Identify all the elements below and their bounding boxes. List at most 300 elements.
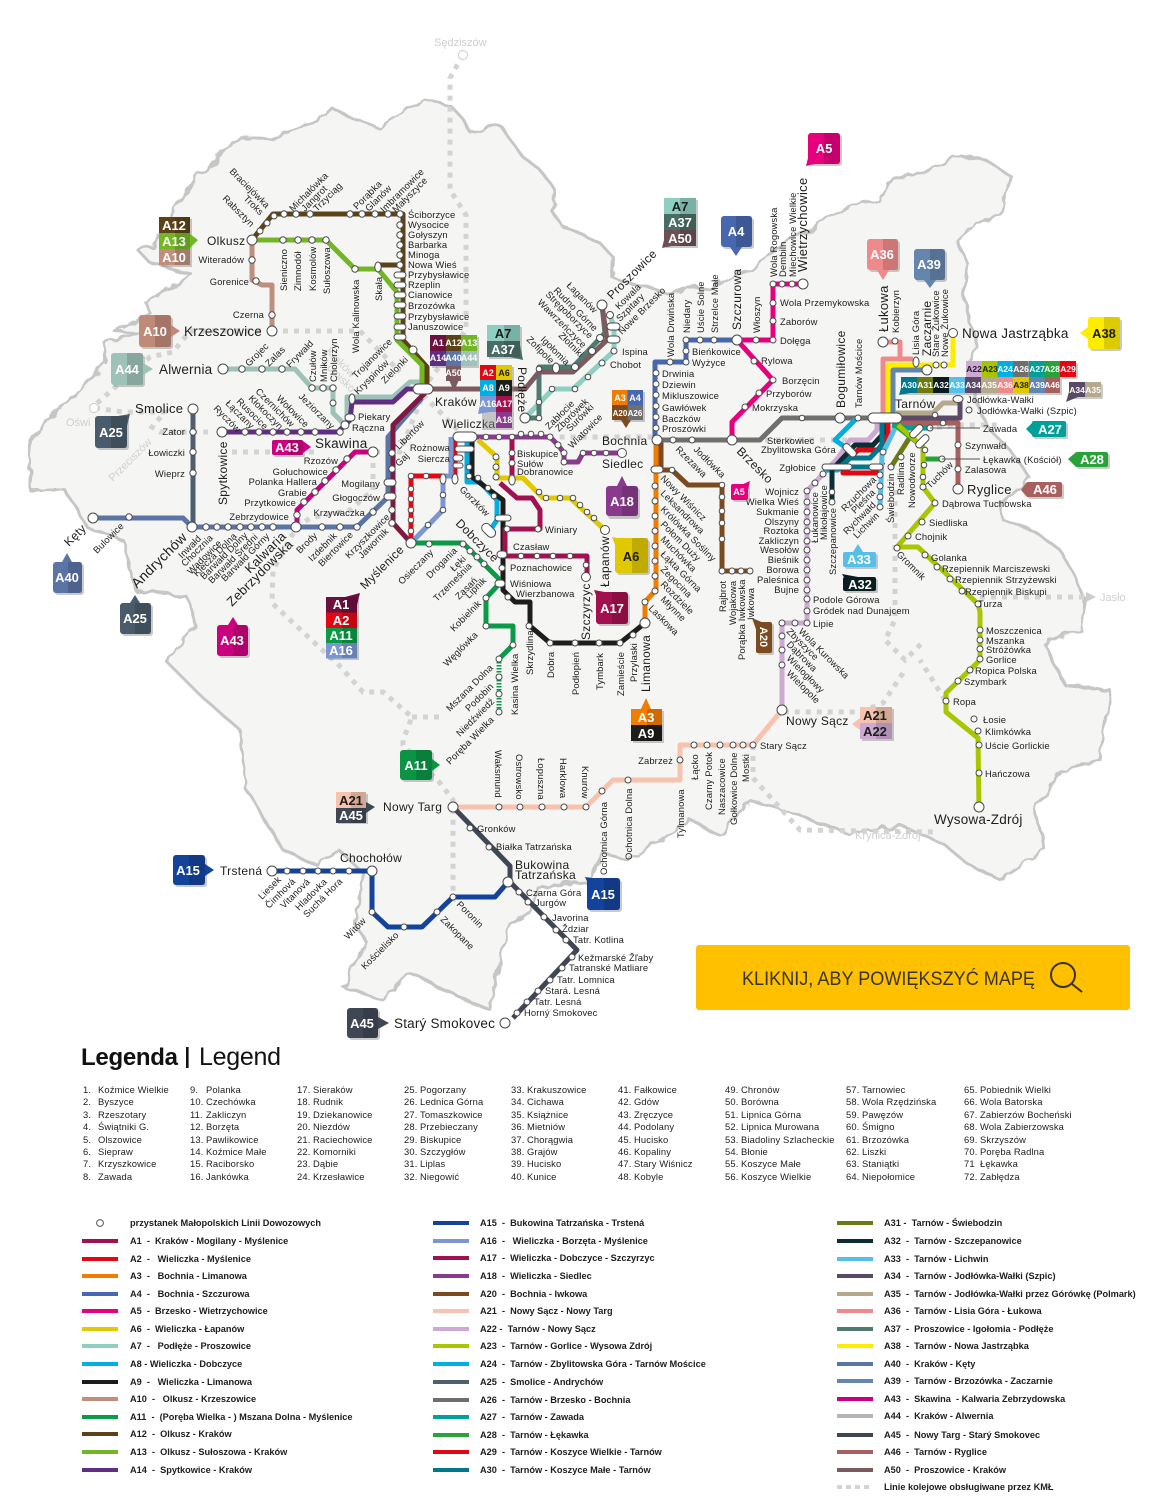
station labels: Wieliczka and Dobczyce: Gorzków: [458, 484, 492, 518]
numbered list of municipalities: Dąbie: [313, 1158, 338, 1169]
station labels: Tarnów and east: Uście Gorlickie: [985, 740, 1050, 751]
station labels: Bochnia to Tarnów: Bieńkowice: [692, 346, 741, 357]
legend: column 1: A12 - Olkusz - Kraków: [130, 1429, 232, 1439]
numbered list of municipalities: 29.: [404, 1134, 417, 1145]
station labels: Wieliczka and Dobczyce: Łapanów: [598, 536, 612, 587]
station labels: Bochnia to Tarnów: Wojnicz: [765, 486, 799, 497]
badge: A21 A22: A22: [863, 724, 887, 739]
station labels: west: Wysocice: [408, 219, 449, 230]
station labels: Bochnia to Tarnów: Zakliczyn: [759, 535, 799, 546]
numbered list of municipalities: 10.: [190, 1096, 203, 1107]
numbered list of municipalities: 60.: [846, 1121, 859, 1132]
station labels: west: Chocznia: [179, 532, 215, 568]
station labels: Bochnia to Tarnów: Przyborów: [766, 388, 812, 399]
legend: column 2: A26 - Tarnów - Brzesko - Bochnia: [480, 1395, 631, 1405]
station labels: Wieliczka and Dobczyce: Sułów: [517, 458, 543, 469]
legend: column 3: Linie kolejowe obsługiwane przez KMŁ: [884, 1482, 1054, 1492]
station labels: Tarnów and east: Szynwałd: [965, 440, 1006, 451]
station labels: south: Čimhová: [263, 875, 298, 910]
route A37: [525, 305, 605, 418]
badge: A1 A12 A13 A14 A40 A44 A50: A13: [461, 338, 477, 348]
station labels: Wieliczka and Dobczyce: Drogania: [424, 544, 460, 580]
station labels: west: Bulowice: [91, 520, 126, 555]
station labels: west: Glanów: [363, 182, 394, 213]
station labels: Tarnów and east: Rzepiennik Marciszewski: [942, 563, 1050, 574]
station labels: Bochnia to Tarnów: Borowa: [766, 564, 800, 575]
station labels: west: Wola Kalinowska: [350, 279, 361, 353]
badge: A1 A12 A13 A14 A40 A44 A50: A12: [445, 338, 462, 348]
numbered list of municipalities: Dziekanowice: [313, 1109, 373, 1120]
station labels: west: Brody: [294, 530, 319, 555]
stops: Tarnów area: [822, 328, 984, 812]
badge: A12 A13 A10: A13: [162, 234, 186, 249]
numbered list of municipalities: 36.: [511, 1121, 524, 1132]
station labels: west: Smolice: [135, 401, 183, 416]
numbered list of municipalities: 54.: [725, 1146, 738, 1157]
numbered list of municipalities: 55.: [725, 1158, 738, 1169]
station labels: south: Ochotnica Górna: [598, 801, 609, 875]
numbered list of municipalities: Jankówka: [206, 1171, 249, 1182]
legend: column 2: A22 - Tarnów - Nowy Sącz: [480, 1324, 596, 1334]
numbered list of municipalities: 17.: [297, 1084, 310, 1095]
route A11: [411, 543, 513, 659]
badge row: A30–A46: A30: [901, 380, 917, 390]
station labels: Tarnów and east: Klimkówka: [985, 726, 1032, 737]
station labels: west: Rzozów: [304, 455, 338, 466]
station labels: Wieliczka and Dobczyce: Dobczyce: [453, 516, 502, 565]
station labels: Bochnia to Tarnów: Dołęga: [780, 335, 811, 346]
station labels: Tarnów and east: Ropa: [953, 696, 977, 707]
station labels: Tarnów and east: Łękawka (Kościół): [983, 454, 1062, 465]
legend: column 3: [837, 1217, 1136, 1492]
station labels: west: Czułów: [307, 350, 318, 382]
station labels: west: Cianowice: [408, 289, 453, 300]
station labels: Bochnia to Tarnów: Tarnów Mościce: [853, 339, 864, 408]
numbered list of municipalities: Koźmice Wielkie: [98, 1084, 169, 1095]
numbered list of municipalities: Śmigno: [862, 1121, 895, 1132]
station labels: Wieliczka and Dobczyce: Igołomia: [539, 334, 573, 368]
station labels: south: Łopuszna: [536, 758, 547, 800]
station labels: Wieliczka and Dobczyce: Limanowa: [639, 635, 653, 692]
station labels: west: Czernichów: [254, 386, 297, 429]
station labels: Wieliczka and Dobczyce: Wawrzeńczyce: [536, 297, 589, 350]
station labels: west: Piekary: [358, 411, 390, 422]
station labels: west: Klecza Dolna: [191, 530, 239, 578]
station labels: south: Chochołów: [340, 851, 402, 865]
badge: A3 A9: [631, 698, 664, 743]
station labels: Tarnów and east: Gorlice: [986, 654, 1017, 665]
station labels: Wieliczka and Dobczyce: Szpitary: [614, 291, 646, 323]
numbered list of municipalities: 20.: [297, 1121, 310, 1132]
badge: A21 A22: [852, 707, 894, 741]
legend heading: Legenda: [81, 1044, 179, 1071]
station labels: west: Spytkowice: [216, 441, 230, 505]
numbered list of municipalities: Brzozówka: [862, 1134, 910, 1145]
badge: A15 left: A15: [176, 863, 200, 878]
numbered list of municipalities: Zabłędza: [980, 1171, 1020, 1182]
numbered list of municipalities: Pawlikowice: [206, 1134, 259, 1145]
station labels: Wieliczka and Dobczyce: Libertów: [393, 418, 426, 451]
station labels: west: Porąbka: [351, 178, 384, 211]
numbered list of municipalities: Pobiednik Wielki: [980, 1084, 1051, 1095]
station labels: Tarnów and east: Chojnik: [915, 531, 947, 542]
badge: A39: A39: [917, 257, 941, 272]
numbered list of municipalities: Wola Batorska: [980, 1096, 1043, 1107]
numbered list of municipalities: Podolany: [634, 1121, 674, 1132]
station labels: Wieliczka and Dobczyce: Wiatowice: [566, 411, 605, 450]
numbered list of municipalities: 64.: [846, 1171, 859, 1182]
numbered list of municipalities: 66.: [964, 1096, 977, 1107]
station labels: west: Zielonki: [379, 354, 410, 385]
badge: A1 A12 A13 A14 A40 A44 A50: A40: [445, 353, 462, 363]
station labels: Wieliczka and Dobczyce: Łaganów: [565, 280, 600, 315]
legend: column 3: A43 - Skawina - Kalwaria Zebrzydowska: [884, 1394, 1066, 1404]
route A34: [895, 400, 960, 418]
station labels: Bochnia to Tarnów: Rozdziele: [659, 579, 696, 616]
badge: A2 A6 A8 A9 A16 A17 A18: A16: [480, 399, 496, 409]
badge: A7 A37 second: A37: [491, 342, 515, 357]
station labels: south: Poronin: [455, 899, 486, 930]
station labels: west: Kosmolów: [307, 246, 318, 291]
numbered list of municipalities: 21.: [297, 1134, 310, 1145]
numbered list of municipalities: Polanka: [206, 1084, 242, 1095]
numbered list of municipalities: Książnice: [527, 1109, 568, 1120]
numbered list of municipalities: Pogorzany: [420, 1084, 466, 1095]
station labels: Tarnów and east: Zalasowa: [965, 464, 1007, 475]
badge: A43 upper: A43: [275, 440, 299, 455]
station labels: west: Jangrot: [299, 183, 329, 213]
numbered list of municipalities: 6.: [83, 1146, 91, 1157]
numbered list of municipalities: Borzęta: [206, 1121, 240, 1132]
station labels: south: Harklowa: [558, 758, 569, 799]
label: Kraków Lotnisko: Kraków: [323, 346, 357, 380]
badge: A38: A38: [1092, 326, 1116, 341]
station labels: Tarnów and east: Łukowa: [876, 285, 891, 332]
numbered list of municipalities: Pawęzów: [862, 1109, 903, 1120]
station labels: Bochnia to Tarnów: Zgłobice: [779, 462, 816, 473]
station labels: Wieliczka and Dobczyce: Wierzbanowa: [516, 588, 575, 599]
station labels: west: Przybysławice: [408, 269, 469, 280]
numbered list of municipalities: Chorągwia: [527, 1134, 574, 1145]
station labels: south: Waksmund: [493, 750, 504, 798]
badge row: A22–A29: A23: [982, 364, 998, 374]
station labels: Bochnia to Tarnów: Mikołajowice: [818, 485, 829, 540]
badge: A21 A45: A21: [339, 793, 363, 808]
route A28: [895, 425, 942, 459]
badge: A1 A2 A11 A16: A11: [329, 628, 353, 643]
badge: A5: [806, 133, 842, 166]
badge: A21 A45: A45: [339, 808, 363, 823]
station labels: Bochnia to Tarnów: Gawłówek: [662, 402, 707, 413]
station labels: west: Olkusz: [207, 234, 245, 248]
numbered list of municipalities: Hucisko: [634, 1134, 668, 1145]
station labels: west: Wołowice: [275, 393, 311, 430]
station labels: Bochnia to Tarnów: Baczków: [662, 413, 701, 424]
numbered list of municipalities: Kopaliny: [634, 1146, 671, 1157]
route A27: [892, 425, 930, 428]
route A22: [782, 420, 877, 710]
legend: column 1: [82, 1218, 353, 1475]
numbered list of municipalities: 72.: [964, 1171, 977, 1182]
station labels: west: Jeziorzany: [297, 391, 337, 431]
station labels: west: Grojec: [243, 340, 271, 368]
station labels: Wieliczka and Dobczyce: Przylaski: [628, 643, 639, 682]
badge row: A30–A46: [899, 377, 1062, 395]
station labels: Wieliczka and Dobczyce: Podłęże: [515, 367, 529, 412]
route A17: [500, 437, 587, 577]
stops: Bochnia, Szczurowa, Brzesko: [642, 279, 861, 605]
numbered list of municipalities: Tarnowiec: [862, 1084, 906, 1095]
station labels: west: Myślenice: [357, 543, 407, 592]
station labels: south: Białka Tatrzańska: [496, 841, 572, 852]
station labels: west: Przybysławice: [408, 311, 469, 322]
route A15: [272, 871, 508, 927]
badge: A39: [914, 249, 947, 288]
badge: A28: [1068, 452, 1110, 469]
station labels: west: Kryspinów: [352, 357, 391, 396]
badge: A6: A6: [623, 549, 639, 564]
route A35: [895, 403, 958, 413]
numbered list of municipalities: 2.: [83, 1096, 91, 1107]
station labels: west: Barbarka: [408, 239, 448, 250]
badge: A43 upper: [272, 440, 311, 457]
station labels: west: Wieprz: [155, 468, 185, 479]
station labels: Wieliczka and Dobczyce: [393, 247, 667, 766]
station labels: Tarnów and east: Stróżówka: [986, 644, 1032, 655]
numbered list of municipalities: Świątniki G.: [98, 1121, 149, 1132]
station labels: Tarnów and east: Golanka: [931, 552, 968, 563]
badge: A18: [606, 476, 640, 519]
station labels: south: Tylmanowa: [675, 789, 686, 838]
station labels: Wieliczka and Dobczyce: Zamieście: [615, 652, 626, 696]
numbered list of municipalities: Kunice: [527, 1171, 557, 1182]
badge: A32: A32: [848, 577, 872, 592]
station labels: south: Tatr. Lesná: [534, 996, 582, 1007]
numbered list of municipalities: 61.: [846, 1134, 859, 1145]
station labels: Bochnia to Tarnów: Wola Kurowska: [797, 626, 852, 681]
station labels: Bochnia to Tarnów: Rzuchowa: [839, 473, 879, 513]
badge: A32: [842, 574, 878, 593]
numbered list of municipalities: Zawada: [98, 1171, 133, 1182]
station labels: west: Skawina: [315, 436, 368, 451]
numbered list of municipalities: Koszyce Małe: [741, 1158, 801, 1169]
station labels: Bochnia to Tarnów: Tuchów: [924, 459, 955, 490]
badge: A3 A4 A20 A26: [612, 390, 645, 428]
station labels: Wieliczka and Dobczyce: Trzemeśnia: [431, 560, 474, 603]
badge: A2 A6 A8 A9 A16 A17 A18: [478, 365, 514, 430]
legend: column 3: A46 - Tarnów - Ryglice: [884, 1447, 987, 1457]
numbered list of municipalities: Wola Rzędzińska: [862, 1096, 937, 1107]
station labels: Bochnia to Tarnów: Muchówka: [659, 534, 699, 574]
numbered list of municipalities: 39.: [511, 1158, 524, 1169]
route A2: [411, 437, 455, 543]
badge: A34 A35: A35: [1085, 385, 1101, 395]
route A14: [222, 389, 423, 432]
station labels: west: Alwernia: [159, 362, 213, 377]
station labels: south: Łącko: [689, 754, 700, 780]
badge: A1 A2 A11 A16: A2: [333, 613, 349, 628]
station labels: Bochnia to Tarnów: Bujne: [774, 584, 799, 595]
numbered list of municipalities: 50.: [725, 1096, 738, 1107]
station labels: Bochnia to Tarnów: Wietrzychowice: [795, 178, 810, 272]
legend: column 2: [433, 1218, 706, 1475]
route A43: [297, 452, 373, 527]
badge row: A22–A29: A28: [1044, 364, 1060, 374]
station labels: Tarnów and east: Gromnik: [895, 549, 928, 582]
numbered list of municipalities: 40.: [511, 1171, 524, 1182]
badge row: A22–A29: A22: [966, 364, 982, 374]
badge: A25 lower: A25: [123, 611, 147, 626]
external station labels: [66, 37, 1126, 842]
legend: column 1: A5 - Brzesko - Wietrzychowice: [130, 1306, 268, 1316]
station labels: west: Ryczów: [212, 403, 243, 434]
legend: column 2: A23 - Tarnów - Gorlice - Wysowa Zdrój: [480, 1341, 652, 1351]
numbered list of municipalities: Komorniki: [313, 1146, 356, 1157]
legend: column 2: A17 - Wieliczka - Dobczyce - Szczyrzyc: [480, 1253, 655, 1263]
station labels: west: Andrychów: [128, 529, 190, 591]
station labels: Wieliczka and Dobczyce: Zofipole: [525, 334, 557, 366]
station labels: Bochnia to Tarnów: Lichwin: [851, 510, 881, 540]
arrow: Jasło: [1086, 592, 1096, 602]
station labels: Bochnia to Tarnów: Porąbka Iwkowska: [736, 579, 747, 660]
numbered list of municipalities: Hucisko: [527, 1158, 561, 1169]
numbered list of municipalities: 52.: [725, 1121, 738, 1132]
numbered list of municipalities: 41.: [618, 1084, 631, 1095]
numbered list of municipalities: 5.: [83, 1134, 91, 1145]
station labels: Bochnia to Tarnów: Jodłówka: [692, 444, 728, 480]
badge: A17: [594, 590, 630, 626]
station labels: Bochnia to Tarnów: Pleśna: [849, 486, 878, 515]
station labels: Bochnia to Tarnów: Podole Górowa: [813, 594, 880, 605]
station labels: Tarnów and east: Łosie: [983, 714, 1006, 725]
station labels: west: Witeradów: [198, 254, 244, 265]
legend: column 1: A2 - Wieliczka - Myślenice: [130, 1254, 251, 1264]
station labels: Wieliczka and Dobczyce: Rożnowa: [410, 442, 451, 453]
station labels: south: Czarny Potok: [703, 752, 714, 810]
numbered list of municipalities: 31.: [404, 1158, 417, 1169]
station labels: Wieliczka and Dobczyce: Podłopień: [570, 652, 581, 695]
numbered list of municipalities: Lednica Górna: [420, 1096, 484, 1107]
numbered list of municipalities: Lipnica Górna: [741, 1109, 802, 1120]
station labels: Tarnów and east: Zawada: [983, 423, 1018, 434]
station labels: west: Kęty: [61, 521, 89, 549]
numbered list of municipalities: Cichawa: [527, 1096, 565, 1107]
badge: A15 left: [173, 855, 214, 887]
label: Przeciszów: Przeciszów: [107, 436, 154, 484]
station labels: Tarnów and east: Dąbrowa Tuchowska: [942, 498, 1032, 509]
numbered list of municipalities: Niepołomice: [862, 1171, 915, 1182]
numbered list of municipalities: 11.: [190, 1109, 203, 1120]
station labels: Bochnia to Tarnów: Lipie: [813, 618, 834, 629]
station labels: south: Witów: [342, 915, 368, 941]
badge: A12 A13 A10: A12: [162, 218, 186, 233]
station labels: Wieliczka and Dobczyce: Wieliczka: [442, 417, 495, 431]
station labels: Bochnia to Tarnów: Wola Przemykowska: [780, 297, 870, 308]
station labels: west: Michałówka: [287, 169, 331, 213]
numbered list of municipalities: 44.: [618, 1121, 631, 1132]
numbered list of municipalities: Szczygłów: [420, 1146, 466, 1157]
route A12: [252, 214, 427, 389]
station labels: Wieliczka and Dobczyce: Poznachowice: [510, 562, 572, 573]
legend heading: [81, 1043, 281, 1071]
numbered list of municipalities: 3.: [83, 1109, 91, 1120]
station labels: Bochnia to Tarnów: Młynne: [659, 594, 688, 623]
numbered list of municipalities: 30.: [404, 1146, 417, 1157]
station labels: south: Mostki: [740, 754, 751, 782]
legend: column 3: A44 - Kraków - Alwernia: [884, 1411, 994, 1421]
station labels: west: Krzywaczka: [313, 507, 366, 518]
station labels: Bochnia to Tarnów: Wola Rogowska: [768, 207, 779, 277]
station labels: west: Łączany: [224, 398, 257, 431]
badge: A34 A35: A34: [1069, 385, 1085, 395]
station labels: Bochnia to Tarnów: Zbylitowska Góra: [761, 444, 836, 455]
station labels: Bochnia to Tarnów: Brzesko: [734, 444, 776, 486]
legend: column 3: A31 - Tarnów - Świebodzin: [884, 1217, 1003, 1228]
legend: column 2: A20 - Bochnia - Iwkowa: [480, 1289, 588, 1299]
route A9: [472, 437, 645, 643]
numbered list of municipalities: 16.: [190, 1171, 203, 1182]
numbered list of municipalities: Biskupice: [420, 1134, 461, 1145]
legend: column 1: A7 - Podłęże - Proszowice: [130, 1341, 251, 1351]
legend: column 3: A33 - Tarnów - Lichwin: [884, 1254, 989, 1264]
legend: column 3: A45 - Nowy Targ - Starý Smokovec: [884, 1430, 1040, 1440]
stops: west: [88, 211, 433, 548]
symbol: railway: [837, 1485, 869, 1489]
numbered list of municipalities: 59.: [846, 1109, 859, 1120]
station labels: Bochnia to Tarnów: Dembiln: [777, 242, 788, 277]
numbered list of municipalities: 15.: [190, 1158, 203, 1169]
numbered list of municipalities: Koszyce Wielkie: [741, 1171, 811, 1182]
badge row: A30–A46: A35: [981, 380, 997, 390]
station labels: Bochnia to Tarnów: Wielopole: [785, 668, 822, 705]
station labels: Bochnia to Tarnów: Rzezawa: [674, 444, 710, 480]
station labels: Tarnów and east: Nowa Jastrząbka: [962, 326, 1069, 341]
badge: A3 A4 A20 A26: A3: [614, 393, 626, 403]
route A50: [423, 305, 607, 389]
station labels: Wieliczka and Dobczyce: Zasań: [453, 575, 479, 601]
icon: magnifier: [1051, 963, 1082, 992]
numbered list of municipalities: 37.: [511, 1134, 524, 1145]
numbered list of municipalities: 19.: [297, 1109, 310, 1120]
station labels: west: Kalwaria: [242, 528, 289, 576]
route A11 dashed section: [496, 659, 502, 712]
station labels: west: Januszowice: [408, 321, 463, 332]
badge: A1 A12 A13 A14 A40 A44 A50: A14: [430, 353, 446, 363]
station labels: west: Troks: [242, 193, 266, 217]
badge: A11: A11: [404, 758, 428, 773]
route A13: [252, 240, 422, 389]
badge: A10: [139, 315, 180, 349]
route A21: [453, 710, 782, 807]
badge: A3 A4 A20 A26: A4: [629, 393, 641, 403]
numbered list of municipalities: 4.: [83, 1121, 91, 1132]
numbered list of municipalities: Zakliczyn: [206, 1109, 246, 1120]
numbered list of municipalities: Zręczyce: [634, 1109, 673, 1120]
badge: A20: A20: [757, 627, 769, 647]
station labels: Wieliczka and Dobczyce: Bochnia: [602, 434, 647, 448]
numbered list of municipalities: Niegowić: [420, 1171, 459, 1182]
numbered list of municipalities: Błonie: [741, 1146, 768, 1157]
station labels: west: Skała: [373, 276, 384, 301]
station labels: south: Knurów: [580, 766, 591, 799]
station labels: west: Zalas: [263, 344, 287, 368]
region outline: Małopolska: [30, 100, 1110, 1010]
badge: A44: A44: [115, 362, 140, 377]
stops: A15 and A45: [267, 825, 575, 1028]
station labels: Bochnia to Tarnów: Nowodworze: [906, 452, 917, 508]
numbered list of municipalities: Grajów: [527, 1146, 558, 1157]
station labels: west: Czerna: [233, 309, 265, 320]
